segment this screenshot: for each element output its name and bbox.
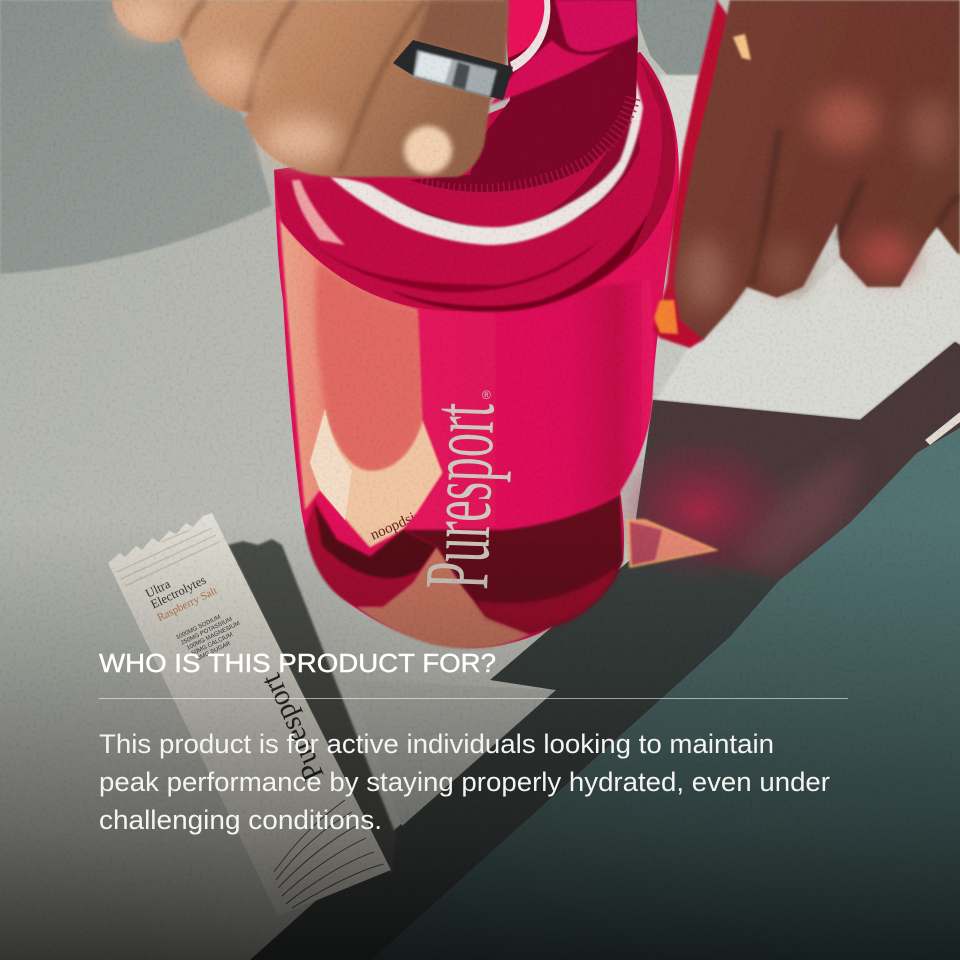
dark liquid left (305, 500, 437, 607)
dark collar under cap (370, 80, 640, 241)
body text: peak performance by staying properly hydrated, even under (99, 767, 830, 797)
cap (410, 0, 638, 192)
white ring (330, 77, 643, 245)
teal surface lower right (372, 428, 960, 960)
dark gradient overlay (0, 520, 960, 960)
sachet label text: 100MG MAGNESIUM (186, 621, 241, 652)
sachet shadow (228, 539, 396, 878)
bottle wordmark: Puresport (405, 401, 513, 591)
warm highlights on right hand (733, 34, 751, 60)
bottle silhouette (274, 52, 679, 648)
cap inner circle (503, 0, 545, 58)
finger gaps (752, 130, 960, 284)
knuckle highlights (262, 118, 338, 162)
sachet label text: Electrolytes (148, 573, 208, 611)
sachet label text: Raspberry Salt (155, 585, 219, 624)
heading: WHO IS THIS PRODUCT FOR? (99, 648, 496, 678)
left hand (112, 0, 513, 177)
mirrored label text: noopdsi (368, 510, 418, 544)
body text: This product is for active individuals looking to maintain (99, 729, 774, 759)
cap bright upper (555, 0, 637, 52)
finger creases (182, 0, 425, 172)
sachet label text: 0MG SUGAR (197, 641, 232, 662)
sachet label text: 1000MG SODIUM (175, 614, 222, 641)
bright concrete right (655, 75, 960, 420)
divider (99, 698, 848, 699)
dark liquid right (403, 495, 623, 633)
ring (393, 40, 513, 100)
sachet brand wordmark: Puresport (254, 668, 330, 786)
round reflection in bottle (316, 262, 423, 471)
sachet label text (143, 557, 247, 670)
shoulder dark band (390, 180, 668, 312)
sachet label text: Ultra (143, 577, 173, 601)
body text: challenging conditions. (99, 805, 382, 835)
shadow disc top left (0, 0, 272, 274)
cap grip ridges (420, 95, 634, 191)
sachet (108, 513, 391, 916)
sachet seal lines (117, 528, 219, 586)
red rim of thumb (653, 0, 745, 348)
glowing fingertip (654, 300, 678, 334)
sachet line pattern (274, 800, 384, 908)
dark finger above ring (415, 0, 508, 65)
sachet label text: 50MG CALCIUM (191, 632, 234, 657)
right hand (653, 0, 960, 348)
bottle (274, 0, 679, 649)
sachet label text: 250MG POTASSIUM (180, 617, 233, 647)
pale label reflection (310, 408, 443, 547)
ground shadow and dark band (250, 342, 960, 960)
shoulder highlight (292, 180, 345, 245)
cap loop white (510, 0, 550, 72)
body text (99, 729, 830, 835)
salmon left panel (280, 220, 443, 547)
magenta body (403, 280, 653, 530)
bottle shoulder (274, 52, 676, 311)
registered mark: ® (482, 388, 491, 402)
bottom salmon rim (357, 547, 530, 649)
red light refraction on ground (628, 520, 716, 567)
pale concrete wedge (350, 680, 556, 826)
shadow at top behind bottle (630, 0, 718, 78)
